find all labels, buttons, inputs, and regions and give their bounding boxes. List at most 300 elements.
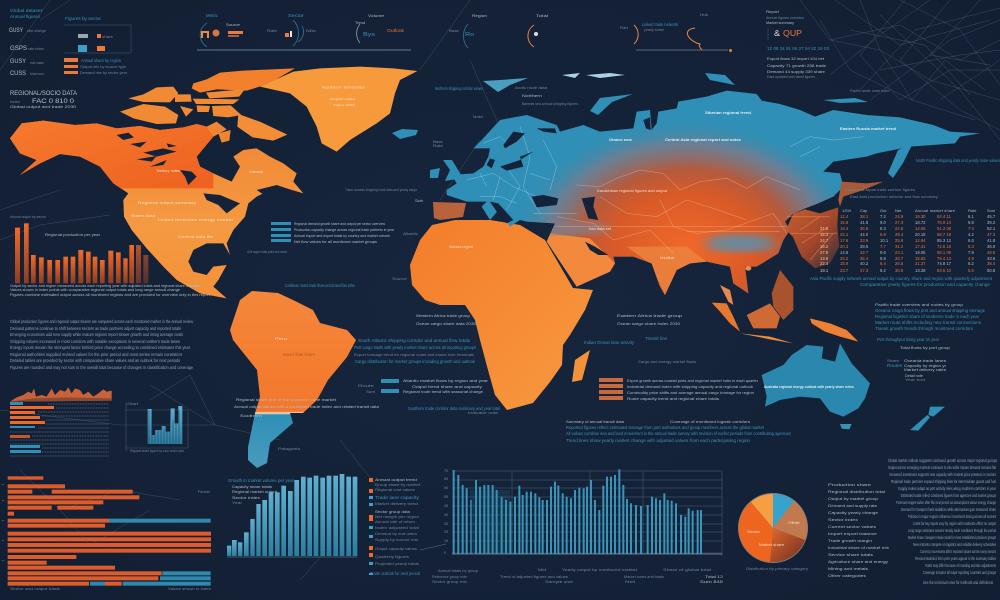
map labels: Regional output summary: [138, 201, 196, 205]
top right data panel: [766, 10, 830, 79]
south east Asia notes: Pacific trade overview and routes by group: [875, 303, 963, 307]
mid labels: Atlantic notes: Northern: [522, 93, 542, 98]
east Asia data table: 8.3: [880, 226, 886, 231]
Indian Ocean notes: Eastern Africa trade group: [617, 313, 683, 318]
south east Asia notes: Oceanic cargo flows by port and annual shipping tonnage: [875, 308, 986, 313]
mid labels: Atlantic notes: Annual import and export totals by country and market volume: [294, 233, 391, 238]
east Asia data table: 31.2: [895, 244, 904, 249]
east Asia data table: 19.1: [820, 268, 829, 273]
south east Asia notes: Port throughput rising year on year: [877, 337, 940, 342]
large blue bar chart: 25: [444, 530, 448, 534]
chart legend list: Output capacity values: [375, 547, 417, 551]
chart legend list: Projected yearly totals: [375, 562, 419, 566]
small framed blue chart: Regional share figures by each sector year: [130, 449, 185, 453]
orange horizontal bar table: Values shown in index: [168, 587, 211, 591]
top left stat panel: GUSY: [10, 58, 27, 65]
top icon row: Volume: [368, 14, 384, 18]
mid labels: Atlantic notes: Caribbean routes trade share and annual flow index: [285, 283, 356, 288]
South Atlantic notes: Southern trade corridor data summary and year total: [408, 406, 500, 411]
South Atlantic notes: Western Africa trade group: [416, 313, 471, 318]
orange bar chart: Annual output by sector: [10, 215, 47, 219]
North America landmass: [10, 68, 303, 298]
top left stat panel: rate change: [27, 29, 46, 33]
chart legend list: Demand by end users: [375, 532, 417, 536]
east Asia data table: 45.7: [987, 214, 996, 219]
top left stat panel: mid value: [30, 61, 44, 65]
south east Asia notes: Total flows by port group: [900, 346, 950, 350]
left paragraph: Global production figures and regional output shares are compared across each monitored market in the annual review: [10, 319, 194, 324]
orange bar chart: Regional production per year: [45, 233, 101, 237]
east Asia data table: 28.7: [895, 256, 904, 261]
large blue bar chart: 0: [444, 551, 446, 555]
east Asia data table: 22.6: [895, 226, 904, 231]
mid labels: Atlantic notes: Net flow values for all monitored market groups: [294, 239, 377, 244]
east Asia data table: 39.2: [987, 220, 996, 225]
east Asia data table: 19.4: [840, 226, 849, 231]
orange horizontal bar table: [2, 476, 211, 591]
blue stepped bar chart: Sector index: [232, 496, 260, 500]
east Asia data table: 13.28: [915, 268, 926, 273]
east Asia data table: Net: [895, 208, 902, 213]
map labels: Canada: [249, 170, 264, 174]
east Asia data table: Asia Pacific supply network annual output by country, share and region with quarterly adjustment: [810, 276, 993, 281]
east Asia data table: 41.6: [860, 220, 869, 225]
coast streaks: [787, 217, 837, 260]
Greenland: Index 2030: [333, 103, 355, 107]
pie chart: Distribution by primary category: [746, 567, 808, 571]
east Asia data table: 21.5: [820, 226, 829, 231]
east Asia data table: 22.4: [820, 261, 829, 266]
South Atlantic notes: Patagonia: [278, 447, 301, 451]
large blue bar chart: 70: [444, 469, 448, 473]
east Asia data table: 6.9: [880, 232, 886, 237]
top left stat panel: rate index: [28, 47, 44, 51]
south east Asia notes: Regional logistics share of seaborne trade in each year: [875, 314, 980, 319]
chart legend list: Net margin per region: [375, 515, 419, 519]
east Asia data table: 13.6: [820, 256, 829, 261]
top right data panel: &: [774, 29, 781, 38]
chart legend list: Sector group data: [375, 510, 410, 514]
east Asia data table: 35.4: [860, 256, 869, 261]
Indian Ocean notes: Coverage of monitored logistic corridors: [670, 420, 750, 424]
South America landmass: [230, 291, 356, 468]
east China coast textured block: [786, 207, 839, 268]
South Atlantic notes: Southern: [240, 414, 262, 418]
east Asia data table: 27.9: [820, 250, 829, 255]
Indian Ocean notes: Transit line: [645, 336, 668, 341]
top right data panel: Market summary: [766, 21, 794, 25]
east Asia data table: 15.8: [840, 220, 849, 225]
mid labels: Atlantic notes: Rate: [433, 144, 443, 148]
mid labels: Atlantic notes: Barents sea annual shipping figures: [522, 102, 578, 106]
large blue bar chart: [420, 469, 723, 584]
east Asia data table: 20.3: [840, 244, 849, 249]
top icon row: Linked trade network: [642, 22, 679, 27]
east Asia data table: 14.8: [840, 250, 849, 255]
top left stat panel: total sum: [30, 72, 44, 76]
east Asia data table: 29.4: [895, 232, 904, 237]
pie legend text: Import export balance: [828, 531, 878, 536]
east Asia data table: [810, 208, 996, 287]
pie chart: [738, 493, 808, 571]
top icon row: Region: [472, 14, 487, 18]
east Asia data table: 9.2: [880, 268, 886, 273]
Greenland: Region data: [330, 97, 356, 101]
pie legend text: Trade growth margin: [828, 538, 872, 543]
top left stat panel: GUSY: [9, 27, 24, 34]
large blue bar chart: 40: [444, 513, 448, 517]
map labels: [131, 110, 897, 389]
top left stat panel: Global dataset: [10, 8, 43, 13]
South Atlantic notes: Indicator note: [468, 411, 498, 415]
large blue bar chart: Share of global total: [663, 568, 711, 572]
map labels: States data: [131, 214, 156, 218]
east Asia data table: 82.4 11: [937, 214, 951, 219]
east Asia data table: Rate: [968, 208, 977, 213]
east Asia data table: 5.3: [968, 244, 974, 249]
east Asia data table: 83.9 10: [937, 268, 952, 273]
east Asia data table: 16.2: [820, 244, 829, 249]
South Atlantic notes: Atlantic market flows by region and year: [403, 378, 489, 383]
east Asia data table: 20.18: [915, 232, 926, 237]
Greenland: Northern Territories: [322, 85, 365, 89]
map labels: Australia regional energy outlook with yearly share notes: [764, 384, 855, 389]
pie legend text: Industrial share of market mix: [828, 545, 889, 550]
east Asia data table: 8.8: [880, 256, 886, 261]
top right data panel: Export flows 32 import 104 net: [767, 56, 825, 61]
pie legend text: Service share totals: [828, 552, 873, 557]
South Atlantic notes: Cargo distribution for market groups including growth and outlook: [355, 359, 476, 364]
east Asia data table: 26.5: [895, 261, 904, 266]
east Asia data table: 14.55: [915, 226, 926, 231]
South Atlantic notes: Route: [358, 384, 374, 388]
top icon row: yearly share: [644, 28, 664, 32]
Indian Ocean notes: Cargo and energy market flows: [638, 360, 696, 364]
east Asia data table: 4.2: [968, 232, 974, 237]
orange horizontal bar table: Note: [198, 490, 210, 494]
east Asia data table: 15.83: [915, 256, 926, 261]
top right data panel: Demand 44 supply 339 share: [767, 69, 826, 74]
top icon row: [197, 13, 732, 52]
Korea and Japan: [838, 182, 883, 207]
Eurasia landmass with heat gradient: [446, 90, 980, 305]
chart legend list: Annual rate of return: [375, 520, 415, 524]
top left stat panel: Annual figures: [10, 14, 40, 19]
east Asia data table: 88.1 09: [937, 250, 952, 255]
top icon row: Base: [449, 29, 459, 33]
South Atlantic notes: Regional share line of the southern cone market: [236, 398, 336, 402]
east Asia data table: 68.7 19: [937, 232, 952, 237]
pie legend text: Regional distribution total: [828, 489, 885, 494]
Hainan: [745, 266, 751, 271]
map labels: Ukraine zone: [609, 137, 633, 142]
chart legend list: Trade lane capacity: [375, 495, 420, 500]
mid labels: Atlantic notes: Gulf region data point and notes: [247, 250, 287, 254]
Spain: [433, 202, 466, 220]
top left stat panel: Demand rise by sector year: [80, 71, 128, 75]
east Asia data table: 4.9: [968, 256, 974, 261]
east Asia data table: 44.0: [860, 232, 869, 237]
large blue bar chart: Sum 845: [700, 580, 723, 584]
mid labels: Atlantic notes: Korea and Japan trade corridor figures: [845, 188, 915, 192]
east Asia data table: 47.3: [987, 232, 996, 237]
pie legend text: Capacity yearly change: [828, 510, 879, 515]
Australia: [762, 343, 945, 431]
pie chart: Other: [788, 521, 801, 525]
east Asia data table: 1204: [842, 208, 852, 213]
Greenland: [260, 67, 417, 152]
pie legend text: Production share: [828, 482, 872, 487]
east Asia data table: 30.6: [895, 268, 904, 273]
right paragraph: [888, 458, 997, 585]
east Asia data table: 12.4: [840, 214, 849, 219]
mid labels: Atlantic notes: Atlantic: [403, 232, 418, 236]
top icon row: Metric: [206, 13, 218, 18]
map labels: India: [660, 256, 676, 260]
east Asia data table: 16.30: [915, 214, 926, 219]
east Asia data table: 85.3 12: [937, 238, 952, 243]
east Asia data table: 27.3: [895, 220, 904, 225]
east Asia data table: 91.2 08: [937, 226, 952, 231]
large blue bar chart: Mid: [538, 568, 546, 572]
Malay peninsula: [720, 285, 733, 305]
pie legend text: Agriculture share and energy: [828, 559, 888, 564]
chart legend list: [369, 478, 421, 576]
heading: FAC 0 810 0: [32, 98, 74, 105]
east Asia data table: Sum: [987, 208, 996, 213]
heading: REGIONAL/SOCIO DATA: [10, 90, 78, 97]
Indian Ocean notes: [566, 313, 791, 443]
Africa landmass: [410, 220, 593, 410]
top right data panel: 12 08 34 91 66 27 54 82 19 03: [767, 46, 830, 51]
striped data table: [10, 402, 109, 456]
east Asia data table: 74.8 17: [937, 261, 952, 266]
south east Asia notes: Year end: [905, 378, 925, 382]
South Atlantic notes: Regional route trend with seasonal change: [403, 389, 484, 394]
large blue bar chart: 65: [444, 477, 448, 481]
south east Asia notes: Share: [887, 359, 899, 363]
chart legend list: Group share by market: [375, 483, 421, 487]
top right data panel: Capacity 71 growth 258 trade: [767, 63, 827, 68]
large blue bar chart: Trend of adjusted figures and values: [500, 575, 568, 579]
mid labels: Atlantic notes: Northern shipping corridor values: [435, 86, 483, 91]
chart legend list: Index adjusted total: [375, 526, 419, 530]
top icon row: Net: [620, 26, 629, 30]
South Atlantic notes: South Atlantic shipping corridor and annual flow totals: [358, 338, 470, 343]
borders: [557, 170, 800, 253]
top icon row: Source: [226, 23, 240, 27]
east Asia data table: 7.9: [968, 250, 974, 255]
map labels: Central data file: [178, 235, 213, 239]
top icon row: Mix: [306, 29, 316, 33]
top right data panel: QUP: [783, 29, 802, 38]
mid labels: Atlantic notes: Source: [392, 277, 407, 281]
Indian Ocean notes: All values combine sea and land movement in the annual trade survey with revision of earlier periods from contributing agencies: [566, 431, 791, 436]
Indian Ocean notes: Indian Ocean lane activity: [584, 340, 635, 345]
chart legend list: Supply by source mix: [375, 538, 418, 542]
South Atlantic notes: [234, 313, 500, 451]
east Asia data table: 10.1: [880, 238, 889, 243]
east Asia data table: 50.8: [987, 268, 996, 273]
map labels: Central Asia regional report and notes: [665, 137, 742, 142]
chart legend list: Annual output trend: [375, 478, 417, 482]
map labels: Territory notes: [156, 169, 180, 173]
heading: Global output and trade 2030: [10, 104, 77, 109]
large blue bar chart: 15: [444, 539, 448, 543]
left paragraph: Figures are rounded and may not sum to the overall total because of changes in classification and coverage: [10, 365, 194, 370]
east Asia data table: 17.6: [840, 238, 849, 243]
east Asia data table: 52.1: [987, 226, 996, 231]
left paragraph: [10, 319, 194, 370]
Indian Ocean notes: Route capacity trend and regional share totals: [627, 396, 719, 401]
east Asia data table: 18.72: [915, 220, 926, 225]
large blue bar chart: Annual totals by group: [438, 569, 478, 573]
east Asia data table: 39.5: [860, 244, 869, 249]
Indian Ocean notes: Industrial demand index with shipping capacity and regional outlook: [627, 384, 753, 389]
east Asia data table: 72.6 16: [937, 244, 952, 249]
large blue bar chart: Yearly output by monitored market: [562, 568, 638, 572]
South Atlantic notes: Port cargo totals with yearly market share across all reporting groups: [354, 345, 476, 350]
top left stat panel: GSPS: [10, 45, 28, 52]
large blue bar chart: Total 12: [705, 575, 723, 579]
south east Asia notes: Detail note: [905, 373, 924, 378]
top left stat panel: Annual share by region: [81, 58, 122, 63]
top icon row: Hub: [700, 13, 708, 17]
arctic islands: [120, 68, 295, 143]
east Asia data table: 6.2: [968, 261, 974, 266]
blue stepped bar chart: [227, 474, 357, 557]
top left stat panel: [9, 8, 131, 77]
pie chart: Sector: [747, 530, 761, 534]
mid labels: Atlantic notes: Regional demand growth share and output per sector overview: [294, 221, 385, 226]
east Asia data table: Cap: [860, 208, 868, 213]
pie chart: Market share: [759, 543, 784, 547]
pie legend text: [828, 482, 889, 578]
east Asia data table: 9.6: [880, 250, 886, 255]
top icon row: Outlook: [387, 28, 405, 33]
large blue bar chart: 45: [444, 504, 448, 508]
east Asia data table: 25.8: [895, 238, 904, 243]
mid labels: Atlantic notes: [247, 86, 1000, 288]
British Isles, Iceland and Arctic islands: [392, 73, 913, 181]
large blue bar chart: Sample size: [545, 580, 573, 584]
east Asia data table: 21.37: [915, 261, 926, 266]
south east Asia notes: [875, 303, 986, 382]
mid labels: Atlantic notes: Trans oceanic shipping route data and yearly cargo: [345, 188, 417, 192]
orange bar chart: [10, 215, 210, 297]
east Asia data table: 18.9: [840, 261, 849, 266]
mid labels: Atlantic notes: Arctic route data: [515, 86, 548, 90]
Indian Ocean notes: Trend lines show yearly market change with adjusted values from each participating region: [566, 438, 751, 443]
east Asia data table: 19.06: [915, 250, 926, 255]
east Asia data table: 6.6: [968, 238, 974, 243]
east Asia data table: 36.8: [860, 226, 869, 231]
heading: Index: [10, 100, 20, 104]
South Atlantic notes: Ocean cargo share data 2030: [416, 321, 477, 326]
top left stat panel: Figures by sector: [65, 16, 102, 21]
chart legend list: Market delivery trend: [375, 502, 418, 506]
mid labels: Atlantic notes: Sub: [415, 198, 424, 203]
east Asia data table: 24.9: [895, 214, 904, 219]
top icon row: Total: [536, 14, 548, 18]
chart legend list: Trade outlook for next period: [370, 571, 421, 576]
dark seas: [487, 117, 651, 255]
orange bar chart: Values shown in index points with comparative regional output totals and long range annual change: [10, 288, 180, 292]
south east Asia notes: Capacity by region yr: [904, 363, 947, 368]
east Asia data table: 41.8: [987, 238, 996, 243]
east Asia data table: 12.94: [915, 238, 926, 243]
large blue bar chart: Net: [625, 580, 637, 584]
South Atlantic notes: Export tonnage trend for regional coast and inland river terminals: [354, 353, 474, 357]
pie legend text: Other categories: [828, 573, 866, 578]
map labels: United territories energy market: [158, 218, 234, 222]
orange horizontal bar table: Sector and output totals: [10, 587, 60, 591]
large blue bar chart: 60: [444, 486, 448, 490]
map labels: Siberian regional trend: [705, 110, 752, 115]
top icon row: Trend: [355, 21, 365, 25]
South Atlantic notes: Sum: [366, 390, 375, 394]
map labels: Kazakhstan regional figures and output: [597, 189, 668, 193]
east Asia data table: 79.4 13: [937, 256, 952, 261]
mid labels: Atlantic notes: Base: [433, 140, 443, 144]
east Asia data table: 7.7: [880, 244, 886, 249]
east Asia data table: 17.41: [915, 244, 926, 249]
east Asia data table: 25.2: [840, 256, 849, 261]
large blue bar chart: Sector group mix: [432, 580, 467, 584]
left paragraph: Demand patterns continue to shift between sectors as trade partners adjust capacity and reported totals: [10, 326, 181, 331]
east Asia data table: 5.5: [968, 268, 974, 273]
east Asia data table: Comparative yearly figures for production and capacity change: [860, 282, 991, 287]
east Asia data table: 76.9 14: [937, 220, 952, 225]
south east Asia notes: Oceania trade lanes: [904, 358, 946, 363]
east Asia data table: 38.4: [987, 261, 996, 266]
top icon row: Bys: [363, 32, 375, 38]
left paragraph: Emerging economies add new supply while mature regions report slower growth and rising average costs: [10, 332, 183, 337]
small framed blue chart: Chart: [126, 402, 139, 406]
east Asia data table: 49.5: [987, 250, 996, 255]
pie legend text: Mining and metals: [828, 566, 868, 571]
map labels: Iran data set: [589, 227, 612, 231]
Madagascar: [572, 350, 590, 382]
east Asia data table: 22.1: [840, 232, 849, 237]
large blue bar chart: Market notes and totals: [624, 575, 664, 579]
mid labels: Atlantic notes: Pacific arctic route index: [850, 89, 890, 93]
chart legend list: Quarterly figures: [375, 555, 409, 559]
east Asia data table: 37.3: [860, 268, 869, 273]
pie legend text: Current sector values: [828, 524, 876, 529]
south east Asia notes: Transit growth trends through monitored corridors: [875, 326, 973, 331]
large blue bar chart: Reference group note: [432, 575, 467, 579]
top right data panel: Annual figures overview: [766, 16, 804, 20]
small orange area chart: [10, 387, 112, 402]
mid labels: Atlantic notes: Note: [473, 115, 483, 119]
left paragraph: Detailed tables are provided by sector with comparative share values and an outlook for next periods: [10, 358, 180, 363]
east Asia data table: Annual market share: [915, 208, 956, 213]
east Asia data table: 6.1: [968, 214, 974, 219]
orange bar chart: Figures combine estimated output across all monitored regions and are provided for overview only in this report: [10, 293, 210, 297]
top left stat panel: share: [102, 35, 113, 39]
large blue bar chart: 30: [444, 522, 448, 526]
top icon row: Sector: [288, 13, 305, 18]
east Asia data table: 42.7: [860, 250, 869, 255]
east Asia data table: 6.4: [880, 261, 886, 266]
east Asia data table: 33.9: [860, 238, 869, 243]
mid labels: Atlantic notes: Production capacity change across regional trade partners in year: [294, 227, 395, 232]
east Asia data table: 40.2: [860, 261, 869, 266]
blue stepped bar chart: Year: [232, 501, 243, 505]
Indian Ocean notes: Commodity price shifts and average annual cargo tonnage for region: [627, 390, 754, 395]
Indian Ocean notes: Ocean cargo share index 2030: [617, 321, 681, 326]
